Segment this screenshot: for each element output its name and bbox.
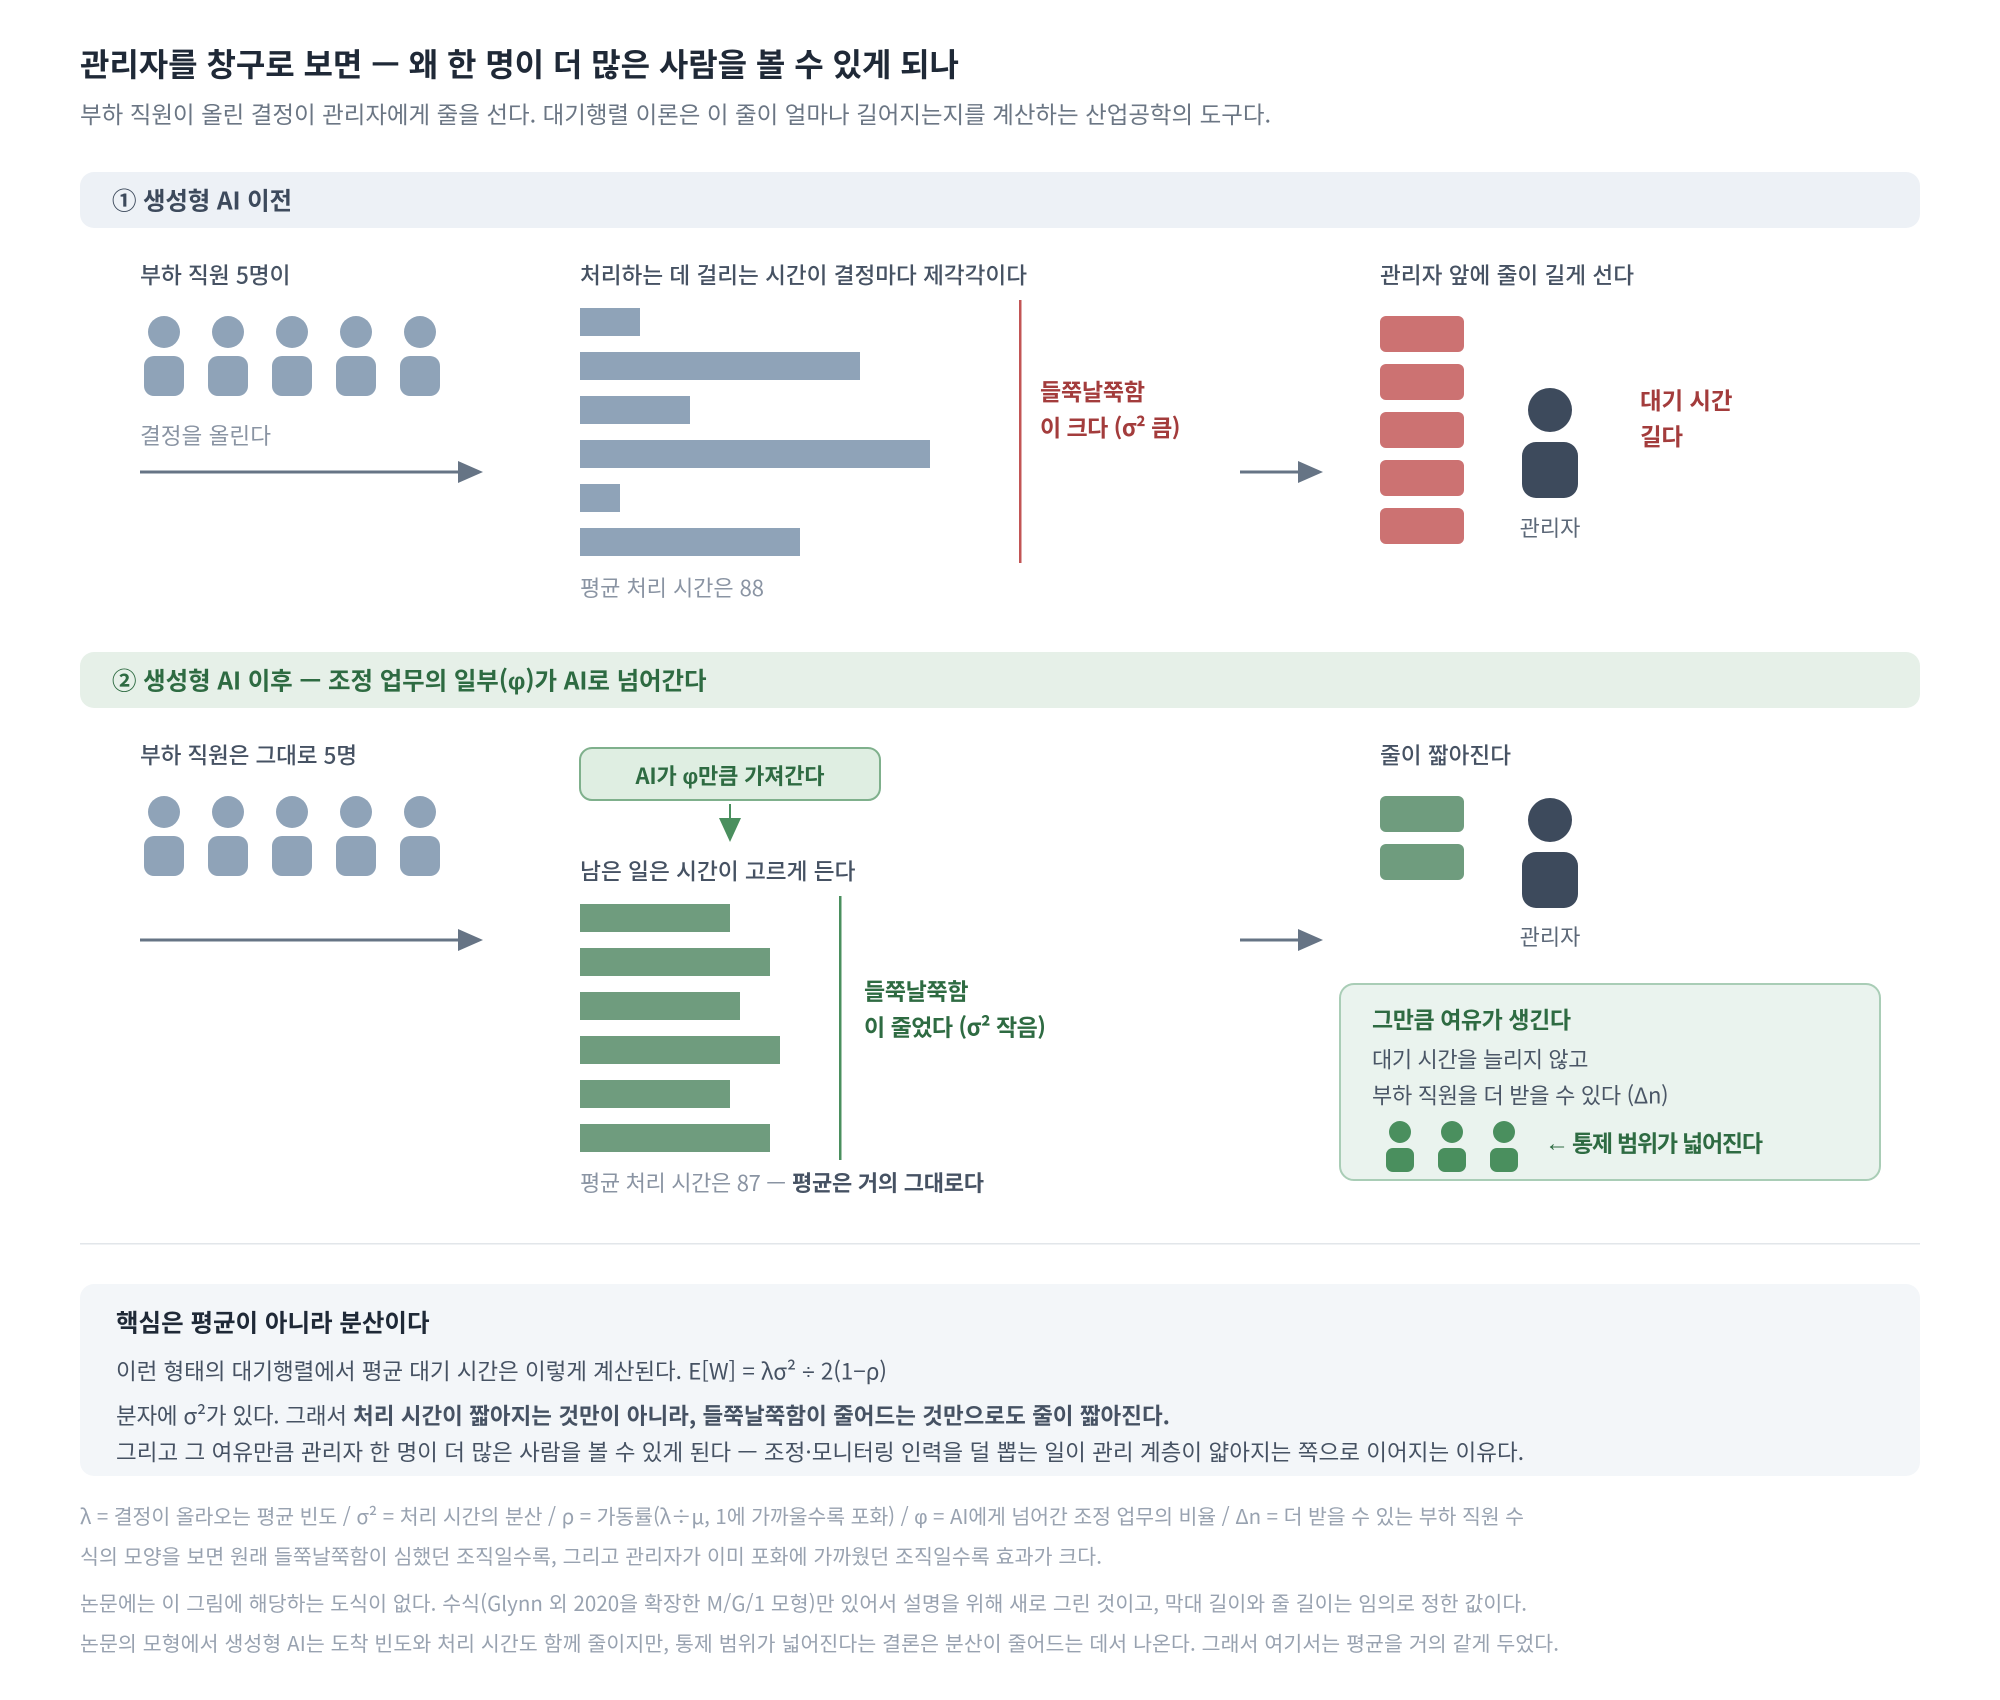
footnote: symbols: [80, 1500, 1524, 1570]
footnote: symbols: 식의 모양을 보면 원래 들쭉날쭉함이 심했던 조직일수록, 그리고 관리자가 이미 포화에 가까웠던 조직일수록 효과가 크다.: [80, 1540, 1102, 1570]
callout: reduced variance: 이 줄었다 (σ² 작음): [864, 1008, 1046, 1042]
footnote: source note: 논문의 모형에서 생성형 AI는 도착 빈도와 처리 시간도 함께 줄이지만, 통제 범위가 넓어진다는 결론은 분산이 줄어드는 데서 나온다. 그래서 여기서는 평균을 거의 같게 두었다.: [80, 1627, 1559, 1657]
footnote: source note: 논문에는 이 그림에 해당하는 도식이 없다. 수식(Glynn 외 2020을 확장한 M/G/1 모형)만 있어서 설명을 위해 새로 그린 것이고, 막대 길이와 줄 길이는 임의로 정한 값이다.: [80, 1587, 1527, 1617]
callout: large variance: 들쭉날쭉함: [1040, 373, 1145, 407]
title: 관리자를 창구로 보면 — 왜 한 명이 더 많은 사람을 볼 수 있게 되나: [80, 40, 959, 86]
takeaway body: 분자에 σ²가 있다. 그래서: [116, 1399, 347, 1431]
caption: mean 88: 평균 처리 시간은 88: [580, 571, 764, 603]
arrow: [1240, 929, 1323, 951]
caption: mean 87: 평균 처리 시간은 87 —: [580, 1166, 786, 1198]
label: manager: 관리자: [1520, 511, 1580, 543]
icon: manager: [1522, 388, 1578, 498]
callout body: 부하 직원을 더 받을 수 있다 (Δn): [1372, 1078, 1668, 1110]
label: processing time: 처리하는 데 걸리는 시간이 결정마다 제각각이다: [580, 258, 1027, 290]
panel: processing time bars before: [580, 258, 1180, 603]
panel: subordinates after: [140, 738, 483, 951]
label: still five: 부하 직원은 그대로 5명: [140, 738, 357, 770]
callout: large variance: [1040, 373, 1180, 443]
bar chart: uneven times: [580, 308, 930, 556]
arrow: [140, 461, 483, 483]
takeaway body: 이런 형태의 대기행렬에서 평균 대기 시간은 이렇게 계산된다. E[W] = λσ² ÷ 2(1−ρ): [116, 1354, 887, 1386]
icon: five people: [144, 316, 440, 396]
callout: reduced variance: 들쭉날쭉함: [864, 972, 968, 1006]
label: five subordinates: 부하 직원 5명이: [140, 258, 290, 290]
label: submit decisions: 결정을 올린다: [140, 418, 271, 451]
callout heading: 그만큼 여유가 생긴다: [1372, 1001, 1571, 1035]
takeaway body: [116, 1354, 1524, 1468]
queue blocks: [1380, 796, 1464, 880]
bar chart: even times: [580, 904, 780, 1152]
icon: manager: [1522, 798, 1578, 908]
callout: capacity gained: [1340, 984, 1880, 1180]
footnote: source note: [80, 1587, 1559, 1657]
spread line: [839, 896, 842, 1160]
callout: long wait: [1640, 382, 1732, 452]
subtitle: 부하 직원이 올린 결정이 관리자에게 줄을 선다. 대기행렬 이론은 이 줄이 얼마나 길어지는지를 계산하는 산업공학의 도구다.: [80, 96, 1271, 130]
callout: long wait: 대기 시간: [1640, 382, 1732, 416]
label: shorter queue: 줄이 짧아진다: [1380, 738, 1511, 770]
caption: mean 87: 평균은 거의 그대로다: [792, 1166, 984, 1198]
callout: long wait: 길다: [1640, 418, 1683, 452]
label: long queue: 관리자 앞에 줄이 길게 선다: [1380, 258, 1634, 290]
icon: five people: [144, 796, 440, 876]
label: span widens: ←: [1545, 1130, 1569, 1157]
callout: AI takes phi: AI가 φ만큼 가져간다: [634, 759, 824, 791]
section header: after AI: [80, 652, 1920, 708]
panel: subordinates before: [140, 258, 483, 483]
section header: before AI: ① 생성형 AI 이전: [112, 182, 292, 218]
label: even time: 남은 일은 시간이 고르게 든다: [580, 854, 856, 886]
panel: long queue: [1380, 258, 1732, 544]
callout: large variance: 이 크다 (σ² 큼): [1040, 409, 1180, 443]
icon: three more people: [1386, 1121, 1518, 1172]
caption: mean 87: [580, 1166, 984, 1198]
arrow: [1240, 461, 1323, 483]
spread line: [1019, 300, 1022, 563]
takeaway heading: 핵심은 평균이 아니라 분산이다: [116, 1304, 430, 1340]
takeaway body: 처리 시간이 짧아지는 것만이 아니라, 들쭉날쭉함이 줄어드는 것만으로도 줄이 짧아진다.: [353, 1399, 1170, 1431]
takeaway body: 그리고 그 여유만큼 관리자 한 명이 더 많은 사람을 볼 수 있게 된다 — 조정·모니터링 인력을 덜 뽑는 일이 관리 계층이 얇아지는 쪽으로 이어지는 이유다.: [116, 1436, 1524, 1468]
label: span widens: 통제 범위가 넓어진다: [1572, 1124, 1763, 1158]
panel: processing time bars after: [580, 748, 1046, 1198]
arrow: [140, 929, 483, 951]
section header: before AI: [80, 172, 1920, 228]
callout body: 대기 시간을 늘리지 않고: [1372, 1042, 1588, 1074]
panel: short queue: [1380, 738, 1580, 952]
callout body: [1372, 1042, 1668, 1110]
footnote: symbols: λ = 결정이 올라오는 평균 빈도 / σ² = 처리 시간의 분산 / ρ = 가동률(λ÷μ, 1에 가까울수록 포화) / φ = AI에게 넘어간 조정 업무의 비율 / Δn = 더 받을 수 있는 부하 직원 수: [80, 1500, 1524, 1530]
section header: after AI: ② 생성형 AI 이후 — 조정 업무의 일부(φ)가 AI로 넘어간다: [112, 662, 707, 698]
callout: AI takes phi: [580, 748, 880, 800]
label: manager: 관리자: [1520, 920, 1580, 952]
arrow: down: [719, 804, 741, 842]
divider: [80, 1243, 1920, 1244]
panel: key takeaway: [80, 1284, 1920, 1476]
queue blocks: [1380, 316, 1464, 544]
callout: reduced variance: [864, 972, 1046, 1042]
